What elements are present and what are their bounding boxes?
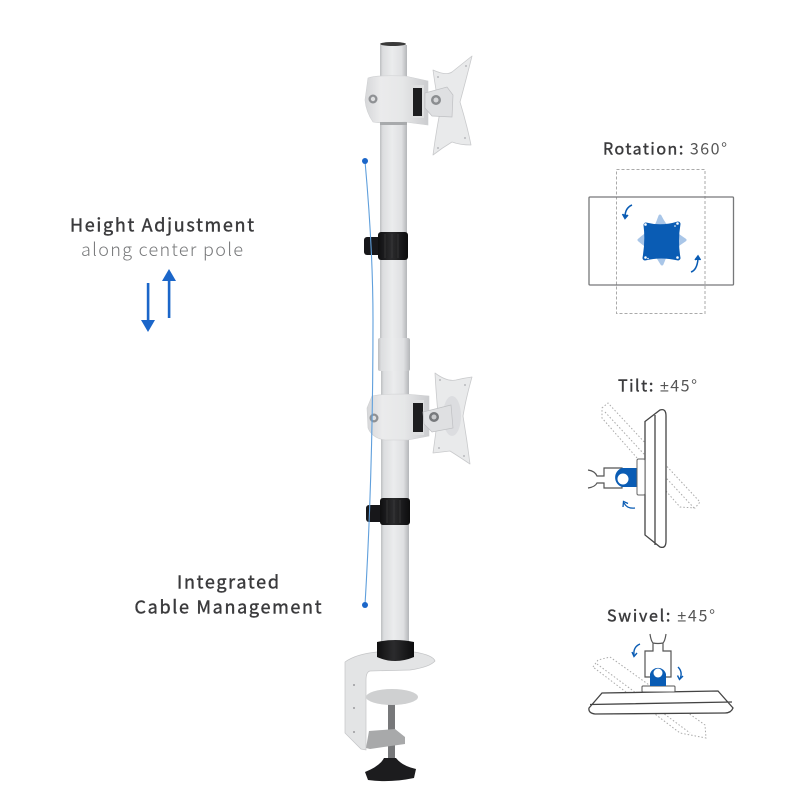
cable line with end dots xyxy=(362,158,373,608)
icon: rotation arrow bottom xyxy=(691,256,700,272)
text: height adjustment: Height Adjustment xyxy=(70,212,254,238)
icon: swivel arrow right xyxy=(678,667,683,680)
panel: rotation xyxy=(589,136,734,314)
text: integrated cable management xyxy=(134,568,322,620)
diagram: swiveled monitor ghost xyxy=(593,657,706,738)
panel: swivel xyxy=(589,602,733,738)
desk clamp xyxy=(345,640,435,781)
icon: rotated mount plate xyxy=(639,216,685,264)
lower cable clip xyxy=(366,498,410,525)
text: height adjustment: along center pole xyxy=(81,236,243,262)
icon: mount plate xyxy=(644,222,679,259)
diagram: bracket xyxy=(642,686,675,692)
diagram: tilted monitor ghost xyxy=(602,403,700,508)
heading: rotation: Rotation: 360° xyxy=(603,136,727,160)
icon: blue pivot xyxy=(650,668,666,686)
text: integrated cable management: Integrated xyxy=(177,568,279,594)
icon: swivel arrow left xyxy=(632,644,640,656)
text: height adjustment xyxy=(70,212,254,262)
diagram: monitor side xyxy=(645,410,666,547)
lower monitor bracket xyxy=(367,373,472,464)
diagram: landscape monitor xyxy=(589,197,734,285)
icon: tilt arrow xyxy=(623,502,635,508)
icon: blue pivot xyxy=(615,468,637,487)
diagram: portrait outline xyxy=(616,170,705,314)
upper cable clip xyxy=(364,232,408,260)
diagram: monitor top xyxy=(589,691,733,714)
mount: pole monitor arm product photo xyxy=(345,42,472,781)
upper monitor bracket xyxy=(365,56,472,155)
icon: height arrows xyxy=(141,269,176,332)
icon: rotation arrow top xyxy=(622,205,632,218)
diagram: arm xyxy=(645,634,671,677)
heading: tilt: Tilt: ±45° xyxy=(618,372,697,396)
diagram: arm xyxy=(588,468,622,488)
panel: tilt xyxy=(588,372,700,547)
diagram: bracket xyxy=(637,459,645,495)
heading: swivel: Swivel: ±45° xyxy=(607,602,715,626)
center pole xyxy=(378,42,410,645)
text: integrated cable management: Cable Management xyxy=(134,594,322,620)
